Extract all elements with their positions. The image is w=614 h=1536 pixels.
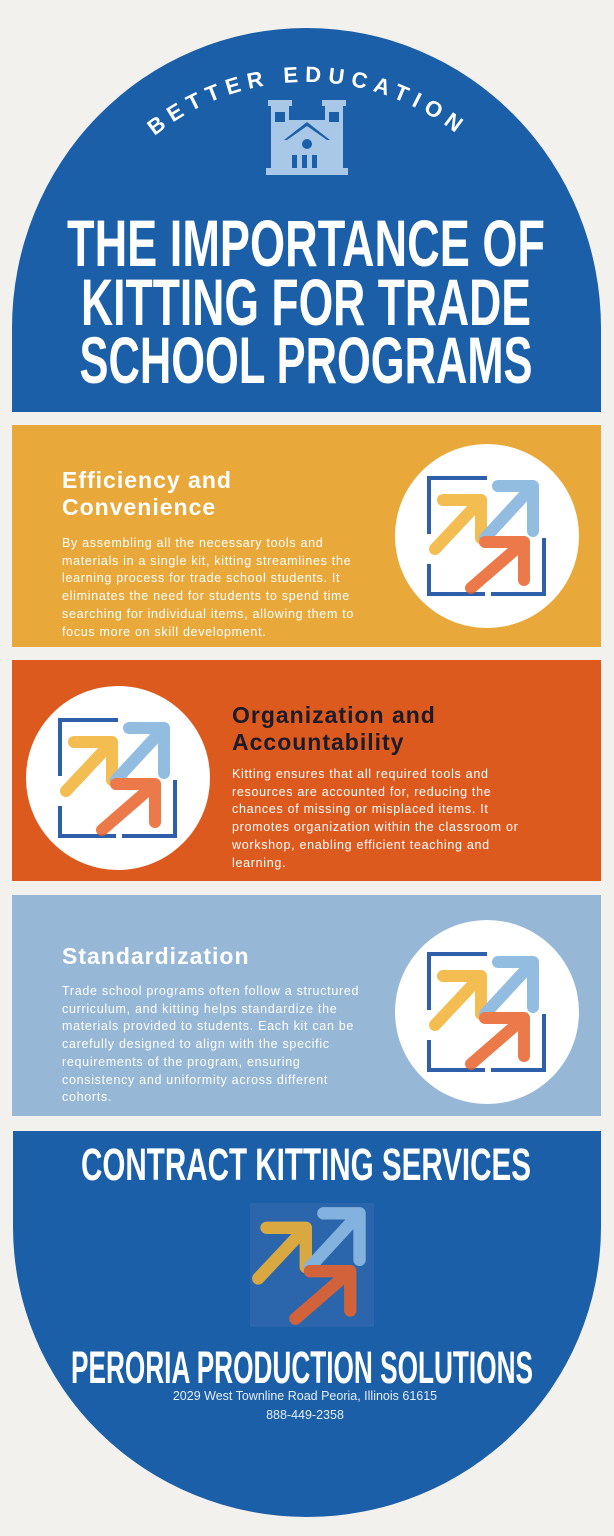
icon: logo circle bbox=[395, 444, 579, 628]
header dome bbox=[12, 28, 601, 412]
body: Trade school programs often follow a structured bbox=[62, 984, 359, 998]
body: materials provided to students. Each kit can be bbox=[62, 1019, 354, 1033]
body: searching for individual items, allowing them to bbox=[62, 607, 354, 621]
heading: Standardization bbox=[62, 943, 250, 969]
body: requirements of the program, ensuring bbox=[62, 1055, 301, 1069]
icon: footer logo bbox=[250, 1203, 374, 1327]
header text and icon bbox=[67, 66, 545, 397]
heading: Organization and bbox=[232, 702, 436, 728]
footer panel bbox=[13, 1131, 601, 1517]
icon: logo circle bbox=[395, 920, 579, 1104]
body: materials in a single kit, kitting streamlines the bbox=[62, 554, 351, 568]
body: chances of missing or misplaced items. It bbox=[232, 802, 489, 816]
arched subtitle: BETTER EDUCATION bbox=[146, 66, 464, 136]
title bbox=[67, 206, 545, 397]
body: carefully designed to align with the specific bbox=[62, 1037, 330, 1051]
body: By assembling all the necessary tools and bbox=[62, 536, 323, 550]
heading bbox=[232, 702, 436, 755]
body bbox=[62, 984, 359, 1104]
body bbox=[62, 536, 354, 639]
body: cohorts. bbox=[62, 1090, 112, 1104]
body: learning. bbox=[232, 856, 286, 870]
body: eliminates the need for students to spend time bbox=[62, 589, 350, 603]
heading bbox=[62, 467, 232, 520]
heading: Efficiency and bbox=[62, 467, 232, 493]
heading: Convenience bbox=[62, 494, 216, 520]
body: learning process for trade school students. It bbox=[62, 571, 340, 585]
icon: logo circle bbox=[26, 686, 210, 870]
body: resources are accounted for, reducing the bbox=[232, 785, 491, 799]
footer titles: 888-449-2358 bbox=[266, 1408, 344, 1422]
panel: organization bbox=[12, 660, 601, 881]
body bbox=[232, 767, 518, 870]
body: promotes organization within the classroom or bbox=[232, 820, 518, 834]
panel: standardization bbox=[12, 895, 601, 1116]
body: workshop, enabling efficient teaching and bbox=[232, 838, 490, 852]
body: consistency and uniformity across different bbox=[62, 1073, 328, 1087]
footer titles: 2029 West Townline Road Peoria, Illinois 61615 bbox=[173, 1389, 437, 1403]
body: focus more on skill development. bbox=[62, 625, 266, 639]
icon: school building bbox=[266, 100, 348, 175]
heading: Accountability bbox=[232, 729, 404, 755]
body: Kitting ensures that all required tools and bbox=[232, 767, 489, 781]
panel: efficiency bbox=[12, 425, 601, 647]
body: curriculum, and kitting helps standardize the bbox=[62, 1002, 337, 1016]
